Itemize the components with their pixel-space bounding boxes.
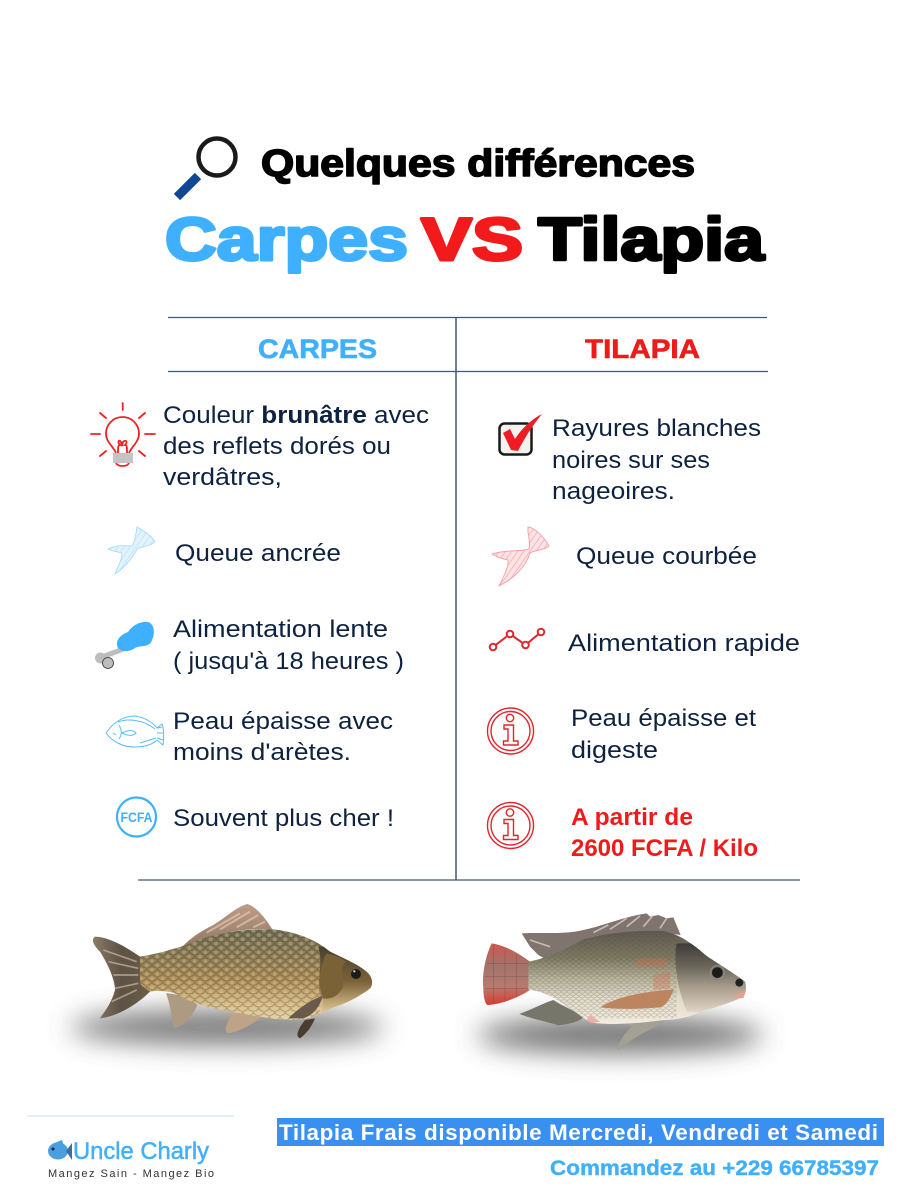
text: alimentation rapide: Alimentation rapide (568, 630, 800, 657)
icon: info (488, 708, 534, 754)
text: alimentation lente: ( jusqu'à 18 heures ) (173, 648, 404, 675)
text: rayures (552, 415, 761, 505)
icon: chicken drumstick (95, 622, 154, 668)
title: Quelques différences: Quelques différences (261, 143, 695, 185)
text: rayures: Rayures blanches (552, 415, 761, 442)
icon: line chart (490, 629, 544, 650)
icon: blue fish tail (108, 527, 155, 574)
text: alimentation lente (173, 616, 404, 675)
icon: info (488, 802, 534, 848)
brand name: Uncle Charly (73, 1138, 209, 1165)
text: couleur: Couleur brunâtre avec (163, 402, 429, 429)
footer: phone number: Commandez au +229 66785397 (550, 1157, 879, 1180)
text: peau épaisse et digeste: digeste (571, 737, 658, 764)
icon: blue fish outline (106, 716, 164, 747)
text: alimentation lente: Alimentation lente (173, 616, 388, 643)
text: peau épaisse: moins d'arètes. (173, 739, 351, 766)
text: prix: 2600 FCFA / Kilo (571, 835, 758, 862)
text: couleur (163, 402, 429, 491)
icon: checkbox (500, 414, 542, 454)
icon: fish emoji (48, 1140, 72, 1160)
text: queue ancrée: Queue ancrée (175, 540, 341, 567)
brand tagline: Mangez Sain - Mangez Bio (48, 1168, 214, 1180)
heading: Carpes VS Tilapia: Tilapia (538, 206, 765, 273)
icon: magnifying glass (177, 138, 236, 197)
photo: carp (70, 904, 383, 1045)
heading: Carpes VS Tilapia: Carpes (165, 206, 408, 273)
panel: carpes column (91, 402, 429, 836)
column heading: CARPES: CARPES (258, 334, 377, 364)
icon: red fish tail (492, 527, 549, 586)
heading: Carpes VS Tilapia (165, 206, 765, 273)
text: peau épaisse (173, 708, 393, 766)
text: souvent plus cher: Souvent plus cher ! (173, 805, 394, 832)
text: couleur: verdâtres, (163, 464, 282, 491)
text: prix (571, 804, 758, 862)
panel: tilapia column (488, 414, 800, 862)
icon: FCFA coin: FCFA (120, 810, 153, 825)
heading: Carpes VS Tilapia: VS (421, 206, 523, 273)
footer: availability banner: Tilapia Frais disponible Mercredi, Vendredi et Samedi (279, 1120, 878, 1145)
text: peau épaisse et digeste (571, 705, 756, 764)
icon: light bulb (91, 403, 155, 466)
column heading: TILAPIA: TILAPIA (585, 334, 700, 364)
photo: tilapia (477, 913, 763, 1053)
text: peau épaisse et digeste: Peau épaisse et (571, 705, 756, 732)
icon: FCFA coin (117, 798, 156, 836)
text: prix: A partir de (571, 804, 693, 831)
footer: brand logo (27, 1116, 234, 1180)
text: queue courbée: Queue courbée (576, 543, 757, 570)
text: rayures: noires sur ses (552, 447, 710, 474)
text: rayures: nageoires. (552, 478, 675, 505)
text: couleur: des reflets dorés ou (163, 433, 391, 460)
text: peau épaisse: Peau épaisse avec (173, 708, 393, 735)
